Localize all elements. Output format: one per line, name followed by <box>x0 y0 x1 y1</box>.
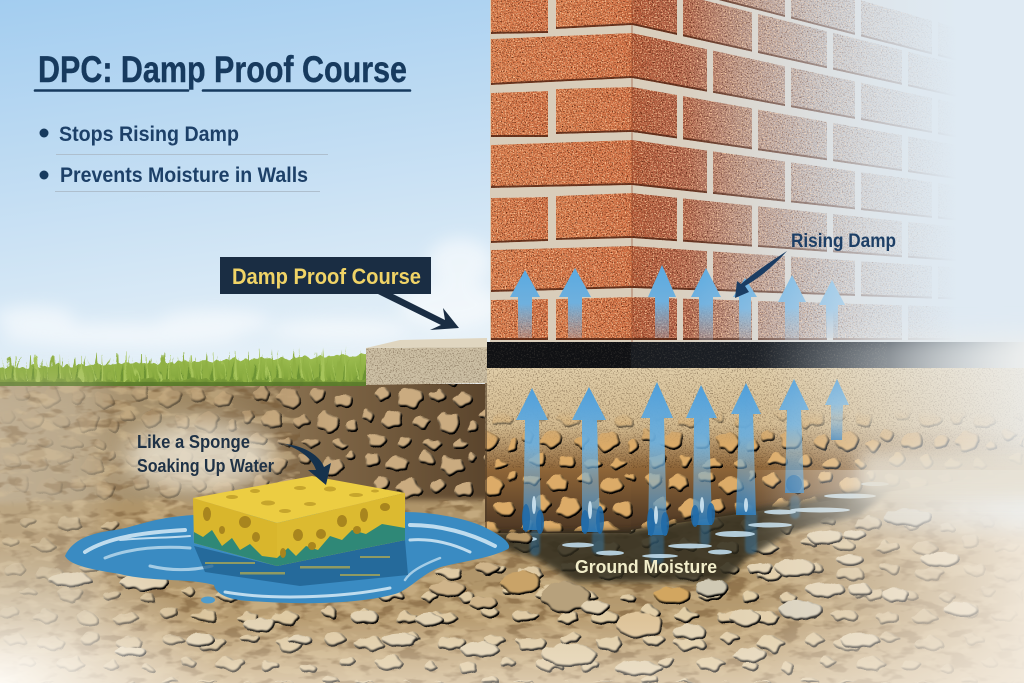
label: ground moisture: Ground Moisture <box>575 557 717 577</box>
panel: concrete ledge <box>366 338 487 385</box>
right side fog over foundation <box>760 335 1024 530</box>
callout: damp proof course label: Damp Proof Course <box>232 264 421 289</box>
sponge green base <box>194 524 405 566</box>
arrow 5 <box>733 278 757 340</box>
water seeping at wall base <box>488 482 900 582</box>
icon: sponge <box>193 476 405 566</box>
sponge right face <box>277 493 405 566</box>
panel: brick wall <box>490 0 944 342</box>
panel: ground surface <box>0 488 1024 683</box>
title: DPC: Damp Proof Course <box>38 49 407 90</box>
bricks <box>491 0 944 340</box>
arrow 6 <box>778 275 806 340</box>
arrow 4 <box>686 385 717 525</box>
panel: puddle <box>65 512 509 604</box>
arrow: rising damp pointer <box>735 251 787 298</box>
corner shade <box>631 0 633 342</box>
arrow: sponge pointer <box>285 444 331 485</box>
arrow 2 <box>572 387 606 532</box>
panel: foundation wall <box>480 368 1024 538</box>
clouds <box>0 238 500 347</box>
ground stones <box>48 509 978 675</box>
arrow 1 <box>516 388 548 530</box>
panel: damp proof course band <box>487 342 1024 368</box>
arrow 6 <box>779 379 809 493</box>
arrow drips and highlights <box>522 475 802 536</box>
vertical mortar joints <box>677 0 938 340</box>
arrow 7 <box>825 379 849 440</box>
sponge holes <box>203 503 390 558</box>
rising damp arrows in the foundation <box>516 379 849 535</box>
arrow 3 <box>648 265 676 338</box>
callout: damp proof course label <box>220 257 431 294</box>
bottom left corner fade <box>0 540 220 683</box>
bottom right ground fade <box>740 470 1024 683</box>
arrow 5 <box>731 383 761 515</box>
arrow 2 <box>559 268 591 338</box>
mortar <box>490 0 884 342</box>
sky background <box>0 0 1024 400</box>
bricks: front face <box>491 0 632 340</box>
bricks: receding side face <box>632 0 944 340</box>
label: like a sponge: Soaking Up Water <box>137 456 274 476</box>
title underline <box>35 89 410 92</box>
soft blend at foundation base <box>860 452 1024 498</box>
label: rising damp: Rising Damp <box>791 231 896 252</box>
arrow 3 <box>641 382 673 535</box>
arrow 7 <box>819 280 845 338</box>
bullet list <box>40 123 328 192</box>
bottom fade <box>0 620 1024 683</box>
text halo <box>124 422 276 490</box>
panel: soil bank behind the ledge <box>0 384 485 508</box>
sponge top face <box>193 476 405 523</box>
arrow 4 <box>691 268 721 340</box>
bullet: stops rising damp: Stops Rising Damp <box>59 123 239 146</box>
right side fog over wall <box>690 0 1024 342</box>
panel: grass <box>0 346 366 386</box>
sponge reflection <box>194 540 408 586</box>
arrow: label to damp proof course <box>378 294 459 330</box>
rising damp arrows in the brick wall <box>510 265 845 340</box>
stray droplet <box>201 596 215 604</box>
bullet: prevents moisture: Prevents Moisture in Walls <box>60 164 308 187</box>
arrow 1 <box>510 270 540 338</box>
label: like a sponge: Like a Sponge <box>137 432 250 452</box>
left bank pale fade <box>0 380 100 630</box>
sponge left face <box>193 498 277 566</box>
